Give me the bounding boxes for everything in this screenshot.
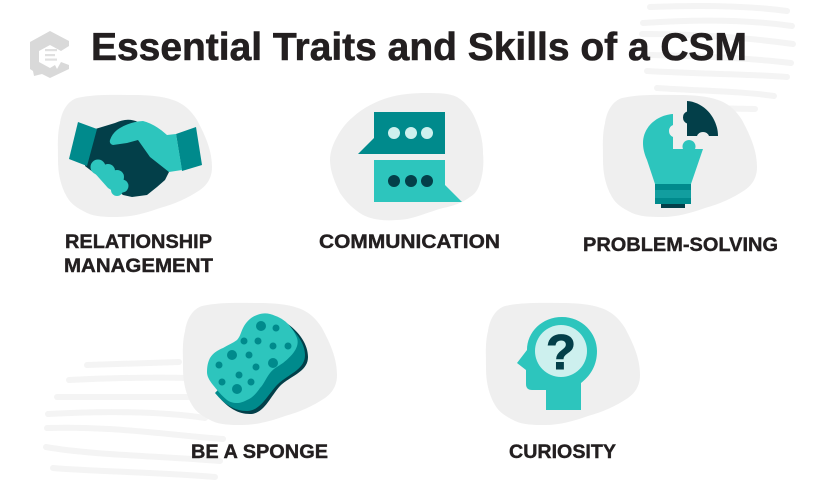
panel: curiosity bbox=[486, 303, 640, 463]
label: MANAGEMENT bbox=[64, 256, 213, 277]
panel: problem-solving bbox=[583, 95, 778, 256]
panel: be a sponge bbox=[183, 303, 337, 463]
title: Essential Traits and Skills of a CSM bbox=[91, 26, 747, 69]
label bbox=[64, 232, 213, 277]
label: CURIOSITY bbox=[509, 442, 616, 463]
icon: chat bubbles bbox=[358, 112, 462, 202]
blob background bbox=[58, 95, 212, 217]
fingers bbox=[90, 160, 128, 196]
blob background bbox=[183, 303, 337, 425]
label: COMMUNICATION bbox=[319, 232, 500, 253]
blob background bbox=[603, 95, 757, 217]
icon: handshake bbox=[69, 120, 202, 197]
label: PROBLEM-SOLVING bbox=[583, 235, 778, 256]
label: BE A SPONGE bbox=[191, 442, 328, 463]
panel: communication bbox=[319, 93, 500, 253]
icon: sponge bbox=[207, 313, 308, 414]
panel: relationship management bbox=[58, 95, 213, 277]
icon: light bulb with puzzle piece bbox=[643, 101, 718, 208]
logo icon bbox=[30, 31, 69, 78]
blob background bbox=[330, 93, 483, 220]
icon: head with question mark: ? bbox=[546, 326, 576, 380]
label: RELATIONSHIP bbox=[65, 232, 212, 253]
blob background bbox=[486, 303, 640, 425]
icon: head with question mark bbox=[517, 317, 597, 410]
